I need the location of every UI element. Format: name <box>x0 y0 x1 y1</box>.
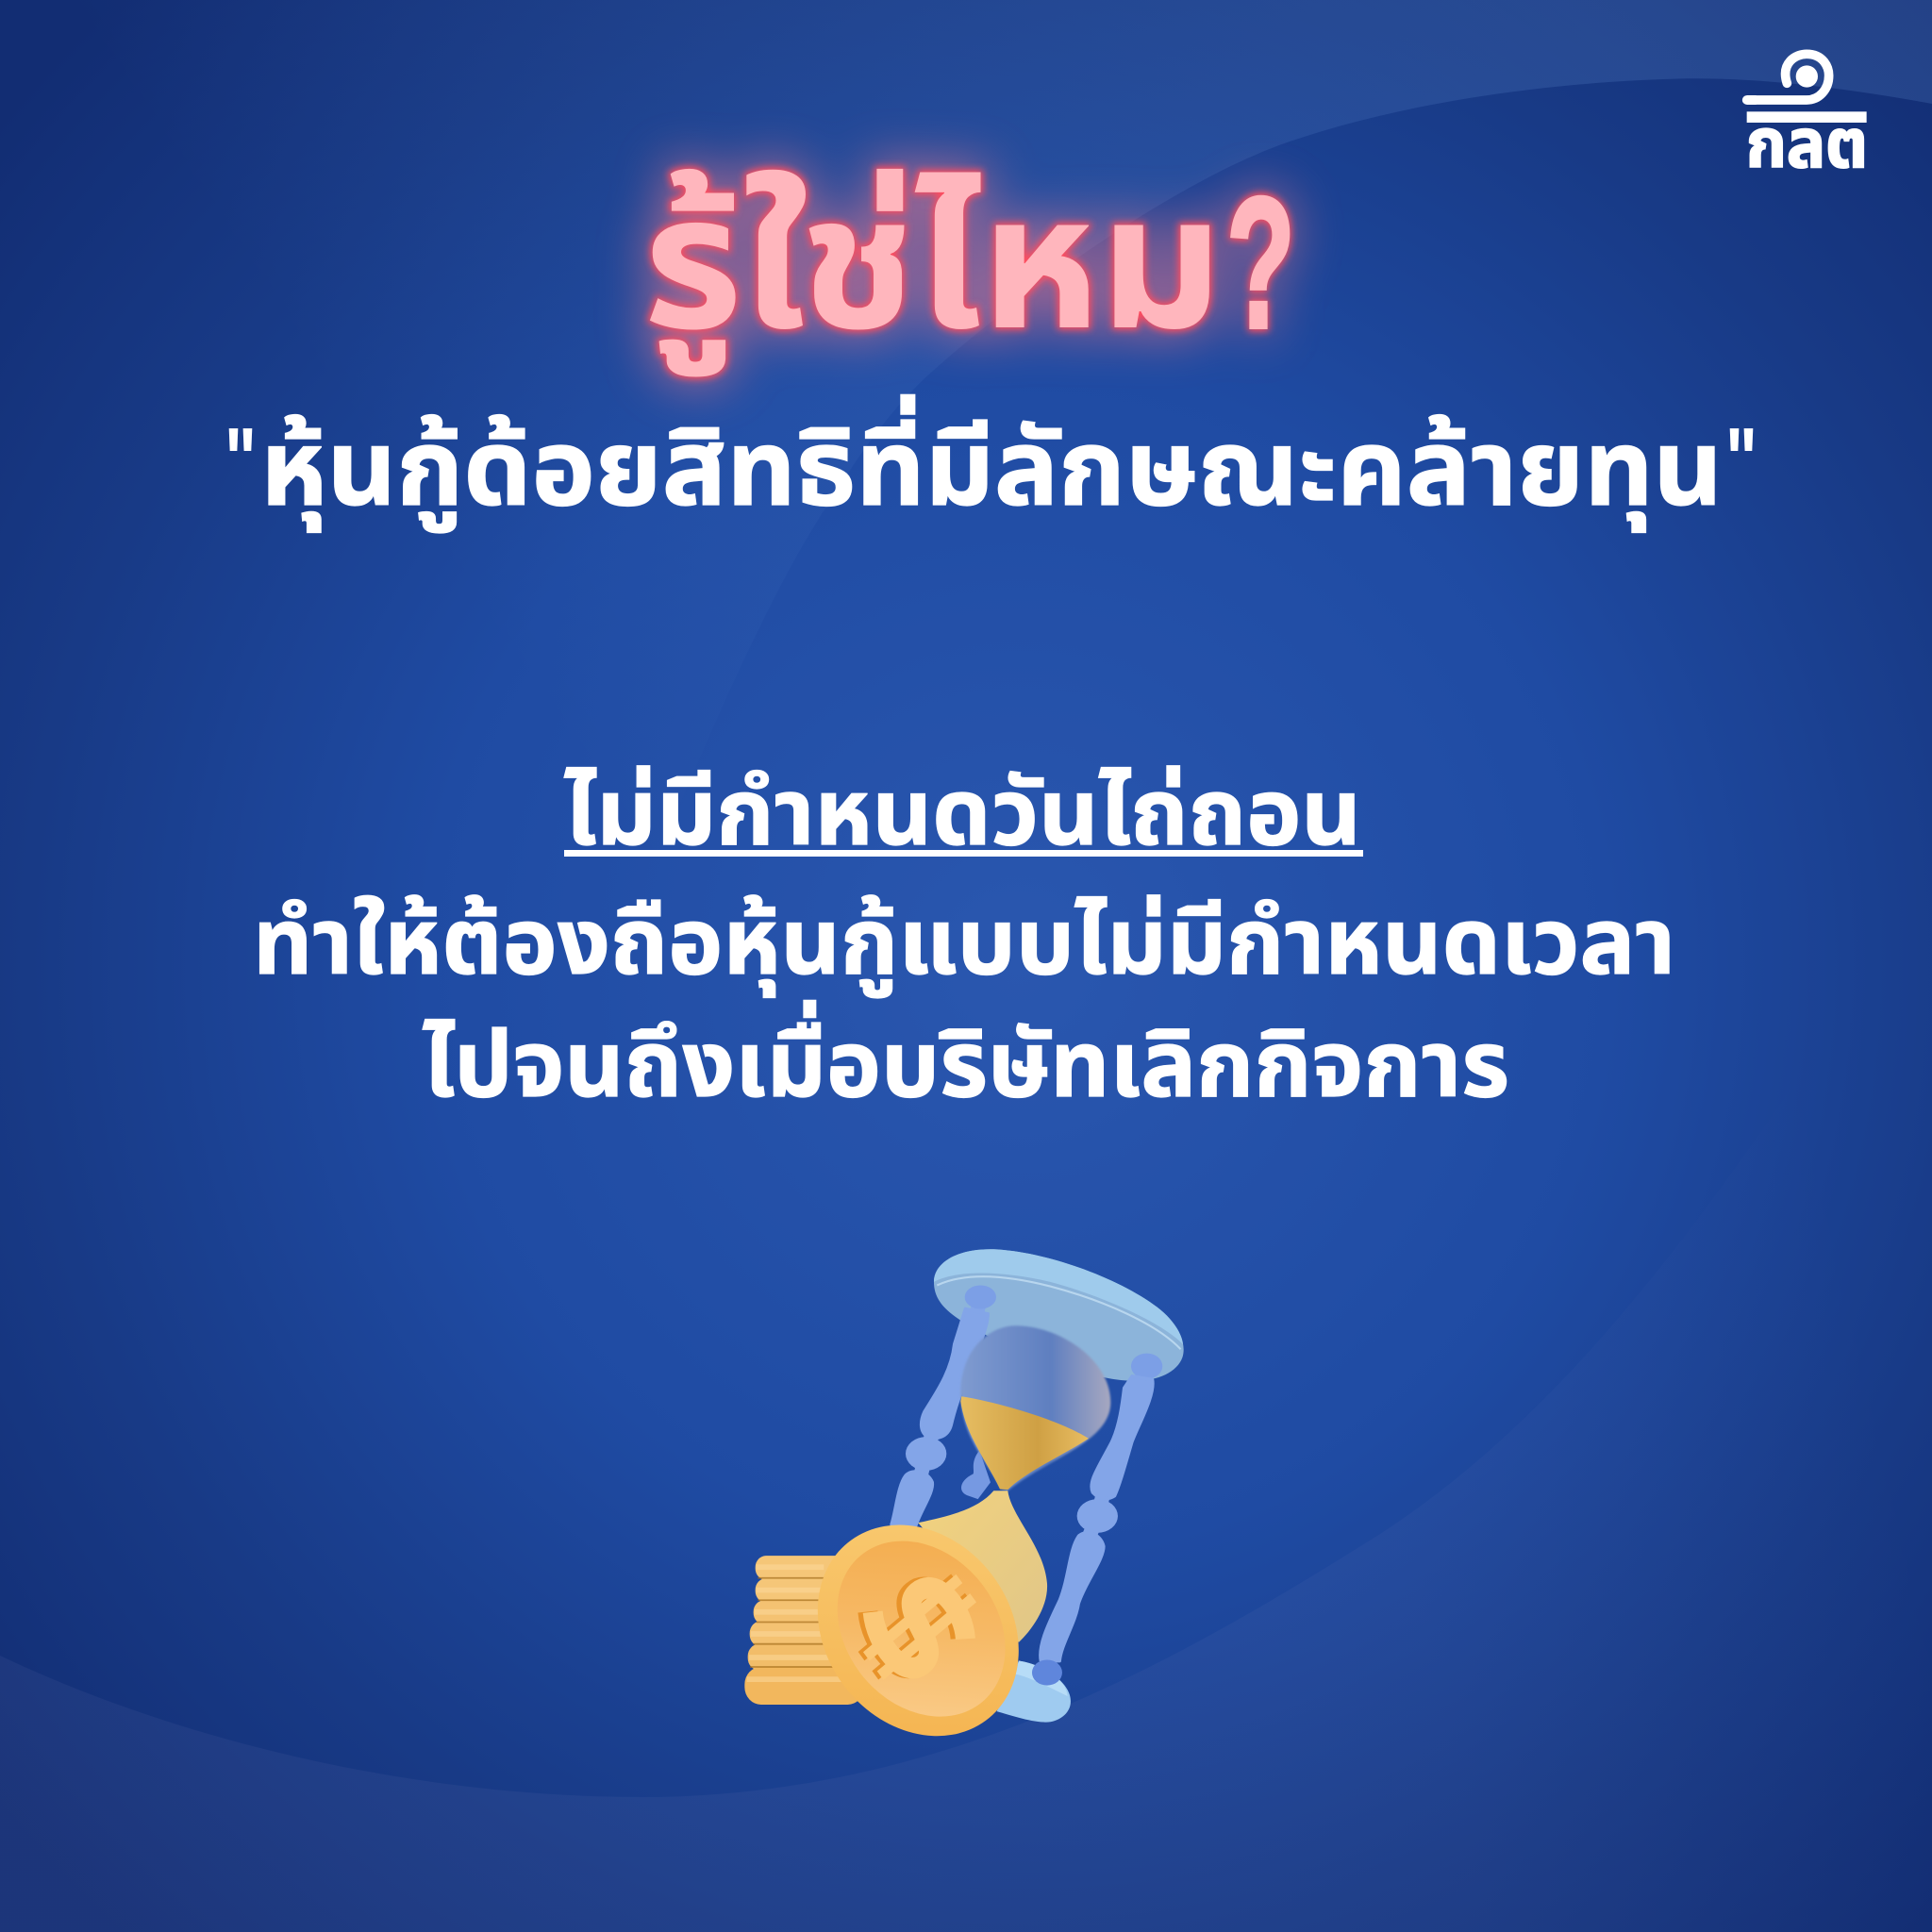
hourglass: lower sand <box>918 1491 1047 1642</box>
subtitle: " <box>225 409 257 510</box>
logo wordmark: กลต <box>1746 107 1868 182</box>
key point heading: ไม่มีกำหนดวันไถ่ถอน <box>564 760 1361 864</box>
title outer glow: รู้ใช่ไหม <box>643 158 1223 376</box>
title outer glow: ? <box>1226 158 1295 367</box>
title: รู้ใช่ไหม <box>643 158 1223 376</box>
explanation text: ไปจนถึงเมื่อบริษัทเลิกกิจการ <box>423 1000 1509 1116</box>
hourglass: upper sand <box>960 1396 1089 1490</box>
hourglass: back leg <box>961 1450 991 1499</box>
explanation text: ทำให้ต้องถือหุ้นกู้แบบไม่มีกำหนดเวลา <box>253 890 1675 998</box>
title inner glow: รู้ใช่ไหม <box>643 158 1223 376</box>
background wave: top right <box>0 0 1932 849</box>
hourglass: bottom disc <box>997 1661 1071 1723</box>
background wave: bottom <box>0 943 1932 1932</box>
logo <box>1746 54 1868 182</box>
illustration: hourglass and coins <box>744 1249 1184 1779</box>
explanation text <box>253 890 1675 1116</box>
title inner glow: ? <box>1226 158 1295 367</box>
title: ? <box>1226 158 1295 367</box>
baht symbol <box>843 1552 989 1700</box>
subtitle: หุ้นกู้ด้อยสิทธิที่มีลักษณะคล้ายทุน <box>260 394 1723 533</box>
logo emblem <box>1747 54 1867 123</box>
hourglass: glass bulb <box>960 1325 1110 1491</box>
hourglass: top disc <box>934 1249 1184 1381</box>
subtitle: " <box>1725 409 1757 510</box>
coin <box>777 1481 1058 1779</box>
coin stack <box>744 1556 864 1705</box>
hourglass: left leg <box>891 1285 996 1526</box>
hourglass: right leg <box>1032 1354 1162 1686</box>
